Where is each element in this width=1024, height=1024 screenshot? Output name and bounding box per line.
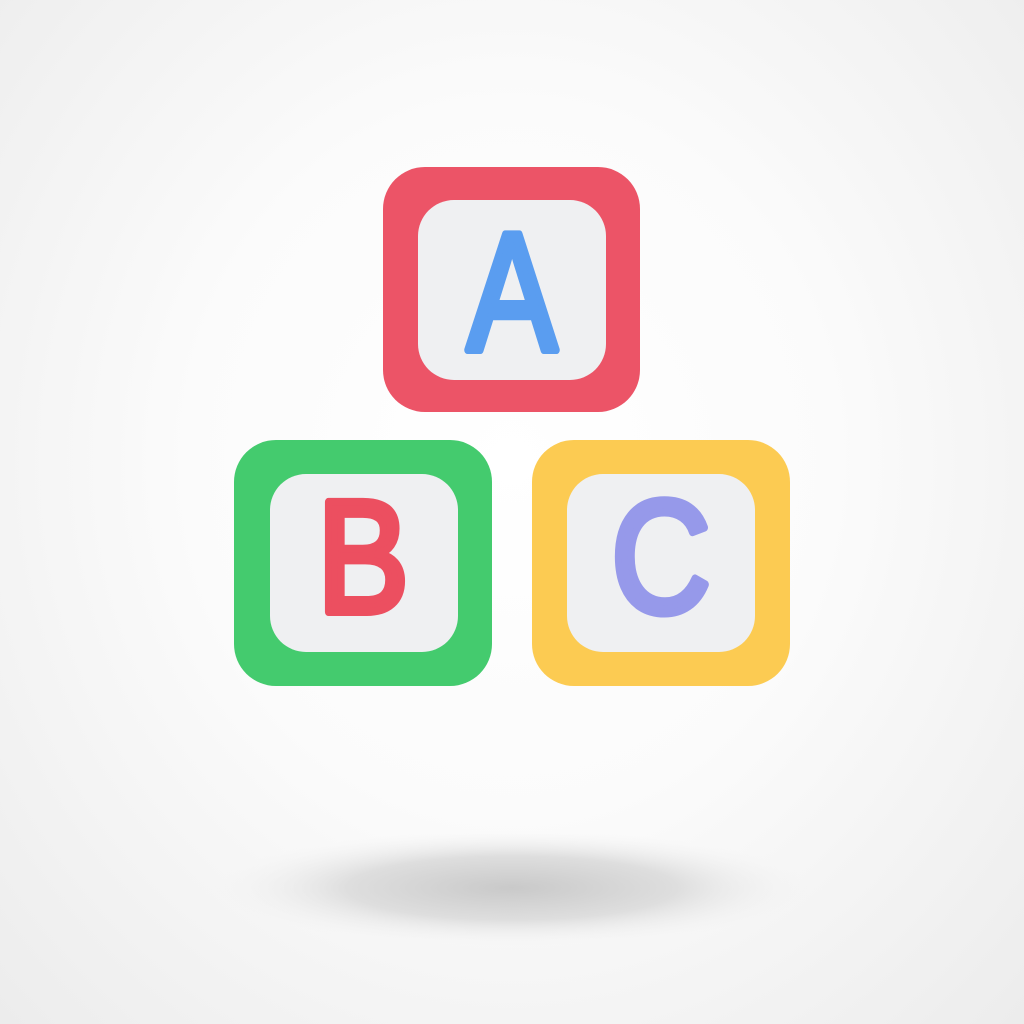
- block B: [234, 440, 492, 686]
- letter C: C: [611, 467, 711, 646]
- shadow: [212, 830, 812, 946]
- block A: [383, 167, 640, 412]
- letter A: A: [467, 199, 557, 386]
- block C: [532, 440, 790, 686]
- letter B: B: [317, 467, 409, 646]
